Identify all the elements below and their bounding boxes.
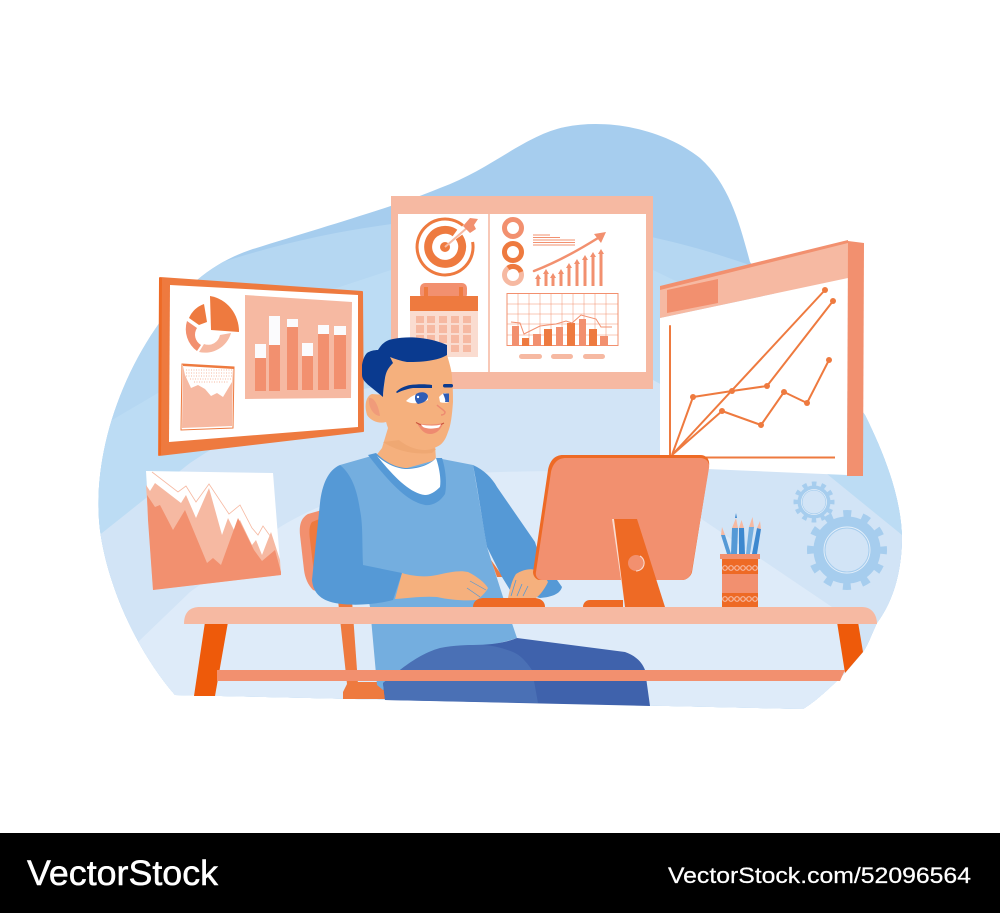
eyes and brows [396,384,453,415]
left sleeve [312,465,402,605]
text lines [533,235,575,245]
man [312,337,650,706]
left wall monitor [159,278,363,455]
ring indicators [504,220,522,284]
small area chart [181,364,234,430]
right arm [473,465,562,598]
mouth [416,422,444,434]
head [383,355,453,450]
keyboard [473,598,545,607]
brand name: VectorStock [27,854,219,893]
right hand [508,569,548,598]
sweater body [340,455,517,690]
small gear [796,484,832,520]
calendar icon [410,283,478,357]
chair [300,510,387,699]
large gear [810,514,884,586]
footer bar [0,833,1000,913]
image id: VectorStock.com/52096564 [668,863,971,888]
t-shirt collar [368,453,446,505]
pencil cup [720,513,761,607]
growth arrow chart [534,232,606,286]
bar panel [245,295,352,399]
target icon [417,218,478,275]
neck [375,428,436,470]
pencils [721,513,761,554]
area chart card [146,471,281,590]
pill buttons [519,354,605,359]
seat peek [491,560,503,577]
right board with line chart [660,240,864,476]
ear [366,394,386,423]
left forearm and hand [395,571,488,600]
background blob [80,100,920,720]
trousers [383,638,650,706]
center board [391,196,653,389]
hair [362,337,447,397]
donut chart [186,296,239,353]
monitor stand [583,519,665,607]
grid bar-line chart [507,293,618,346]
desktop monitor [533,455,709,607]
desk [184,607,877,696]
line chart [670,287,836,458]
